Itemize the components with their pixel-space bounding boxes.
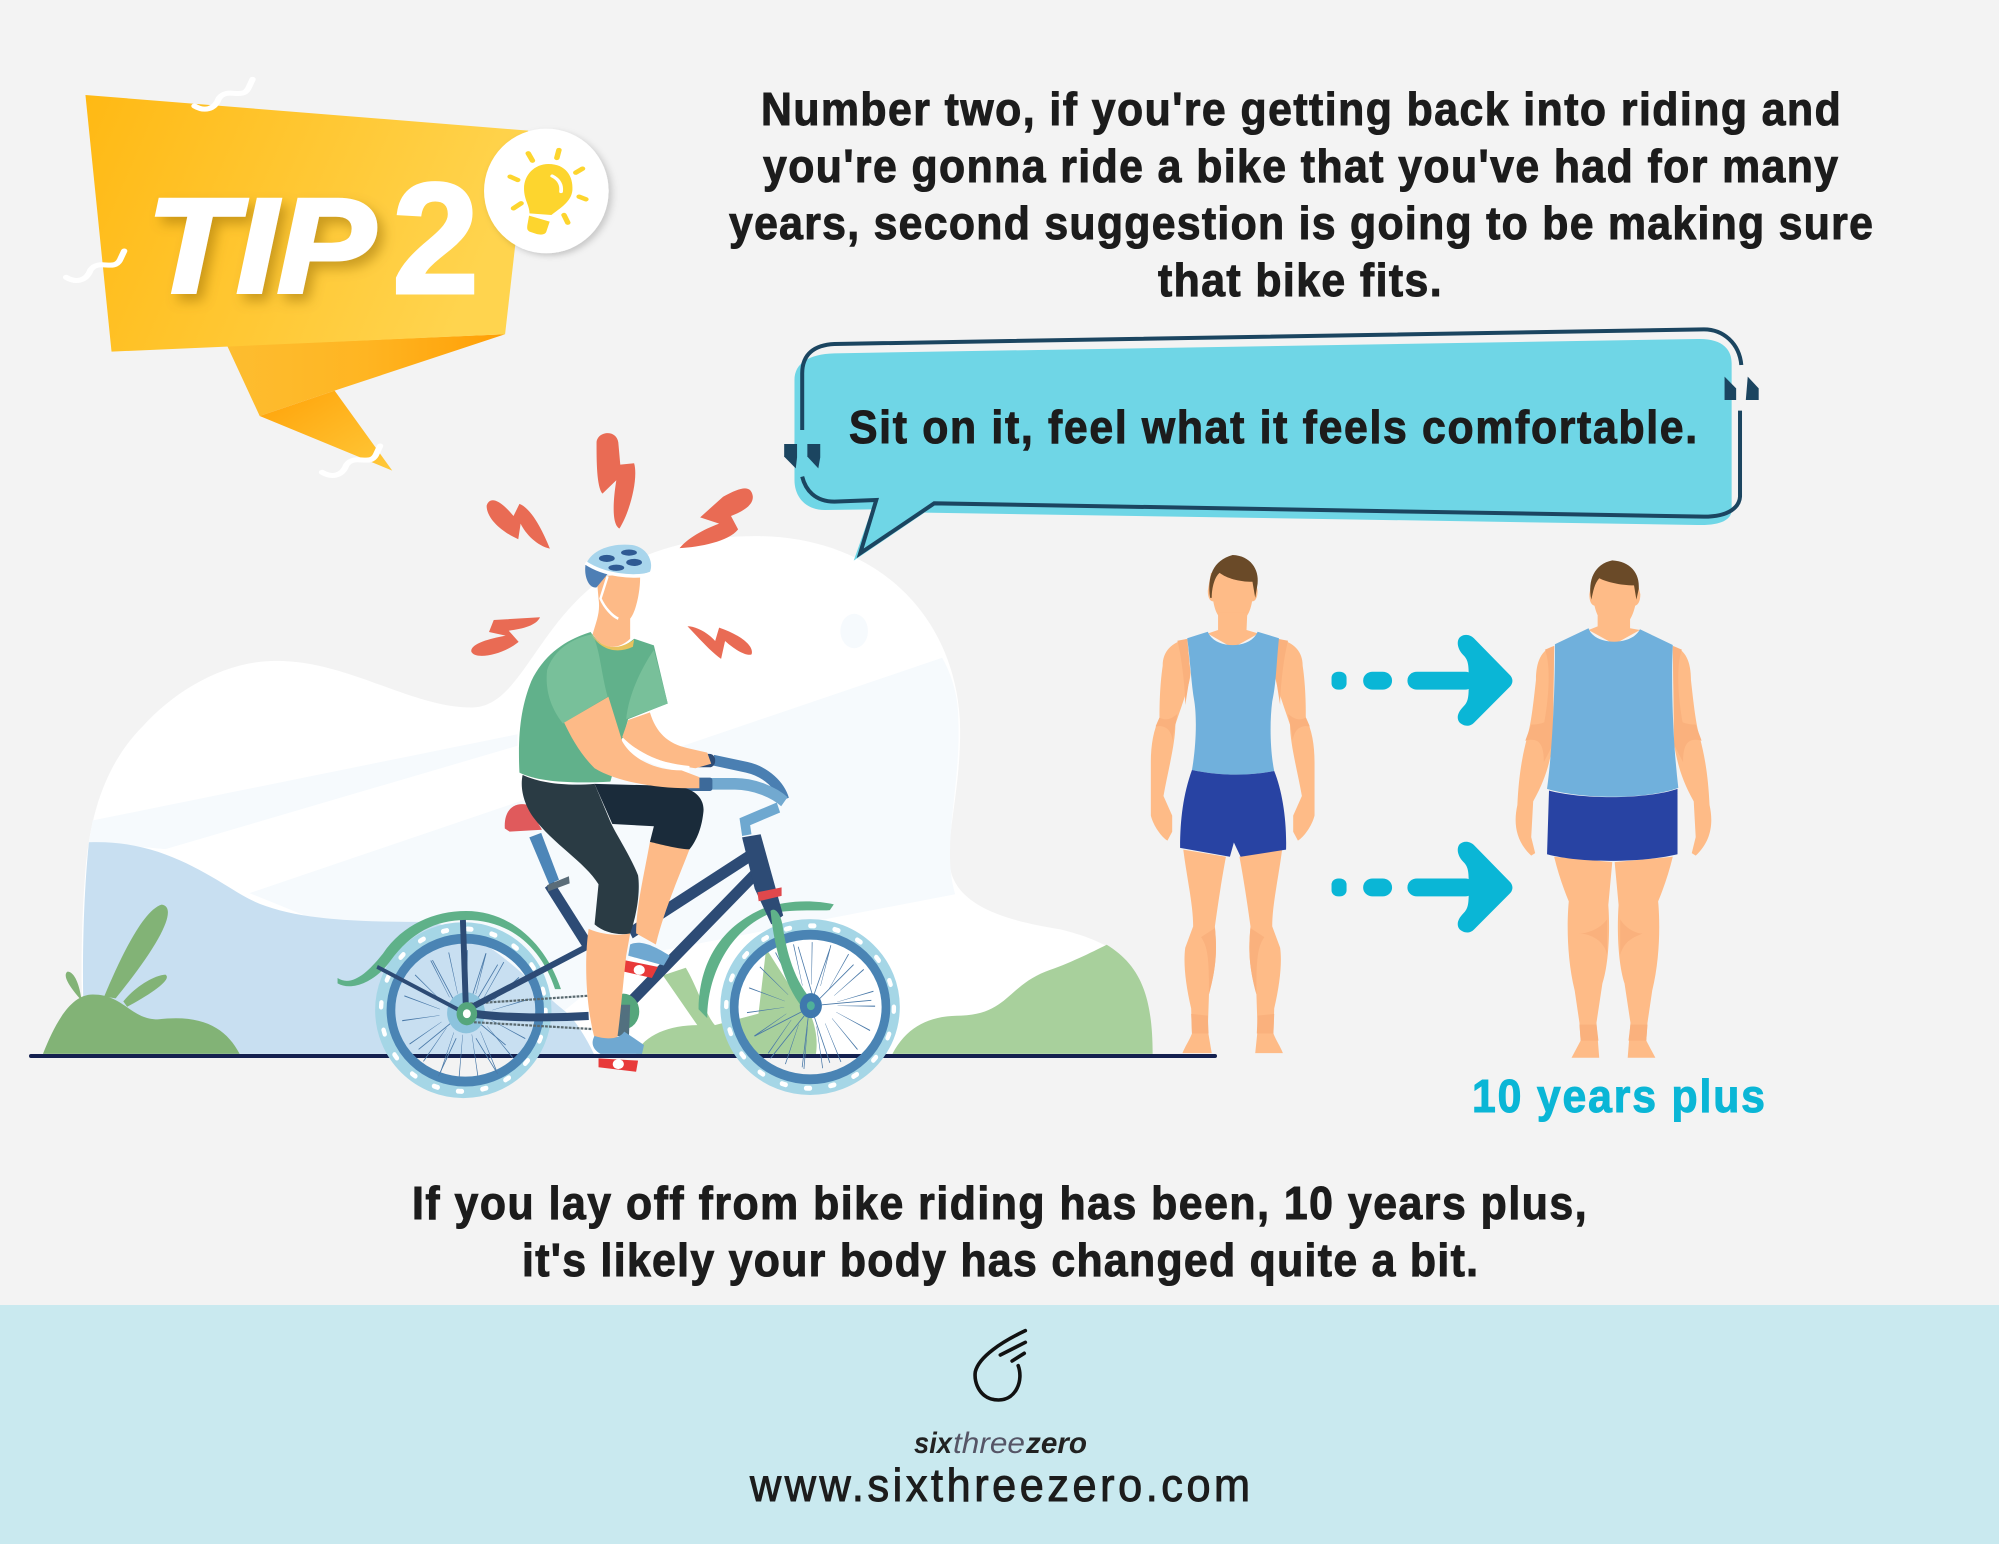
icon: light bulb badge — [484, 129, 609, 253]
intro paragraph: Number two, if you're getting back into riding and — [761, 85, 1841, 135]
speech bubble — [784, 329, 1759, 561]
bubble shape — [784, 329, 1759, 561]
front wheel — [726, 926, 894, 1088]
person: after — [1516, 560, 1711, 1058]
banner ribbon — [66, 79, 528, 475]
intro paragraph — [729, 85, 1873, 306]
pain bolts — [471, 433, 753, 659]
bicycle — [338, 754, 894, 1091]
near lower leg — [586, 929, 630, 1045]
arrow top — [1332, 635, 1512, 726]
bushes middle — [636, 949, 817, 1054]
rider — [519, 545, 711, 1072]
brand wordmark — [914, 1427, 1087, 1460]
frame tubes — [377, 857, 754, 1017]
shading — [1525, 646, 1702, 1041]
fork — [771, 910, 814, 1011]
tip banner — [66, 79, 609, 475]
website url: www.sixthreezero.com — [749, 1461, 1250, 1511]
banner text TIP: TIP — [147, 172, 376, 321]
intro paragraph: you're gonna ride a bike that you've had for many — [763, 142, 1838, 192]
helmet — [585, 561, 608, 587]
chain — [466, 994, 620, 1031]
conclusion text — [412, 1179, 1587, 1286]
label: 10 years plus: 10 years plus — [1472, 1072, 1765, 1122]
icon: sixthreezero logo — [975, 1331, 1025, 1400]
seat post and saddle — [529, 833, 559, 884]
brand wordmark: six — [914, 1427, 953, 1460]
intro paragraph: years, second suggestion is going to be making sure — [729, 199, 1873, 249]
cyclist illustration — [338, 433, 894, 1091]
arms — [622, 712, 711, 768]
person: before — [1151, 555, 1315, 1053]
ground line — [29, 1054, 1217, 1058]
shirt — [519, 632, 668, 782]
banner text 2: 2 — [392, 151, 479, 327]
neck and face — [593, 574, 640, 647]
intro paragraph: that bike fits. — [1158, 256, 1442, 306]
arrow bottom — [1332, 842, 1512, 932]
fenders — [338, 911, 561, 989]
conclusion text: it's likely your body has changed quite a bit. — [522, 1236, 1478, 1286]
landscape background — [43, 536, 1153, 1054]
rear wheel — [381, 929, 546, 1091]
brand wordmark: three — [953, 1427, 1025, 1460]
near shoe — [593, 1032, 644, 1054]
conclusion text: If you lay off from bike riding has been, 10 years plus, — [412, 1179, 1587, 1229]
bush with leaves left — [43, 905, 240, 1054]
shading — [1156, 639, 1310, 1034]
footer band — [0, 1305, 1999, 1544]
handlebars — [745, 807, 778, 835]
body comparison — [1151, 555, 1711, 1058]
bushes right — [892, 945, 1153, 1054]
far leg and shoe — [636, 842, 689, 945]
shorts — [595, 784, 704, 849]
bubble text: Sit on it, feel what it feels comfortable. — [849, 403, 1697, 453]
brand wordmark: zero — [1025, 1427, 1087, 1460]
